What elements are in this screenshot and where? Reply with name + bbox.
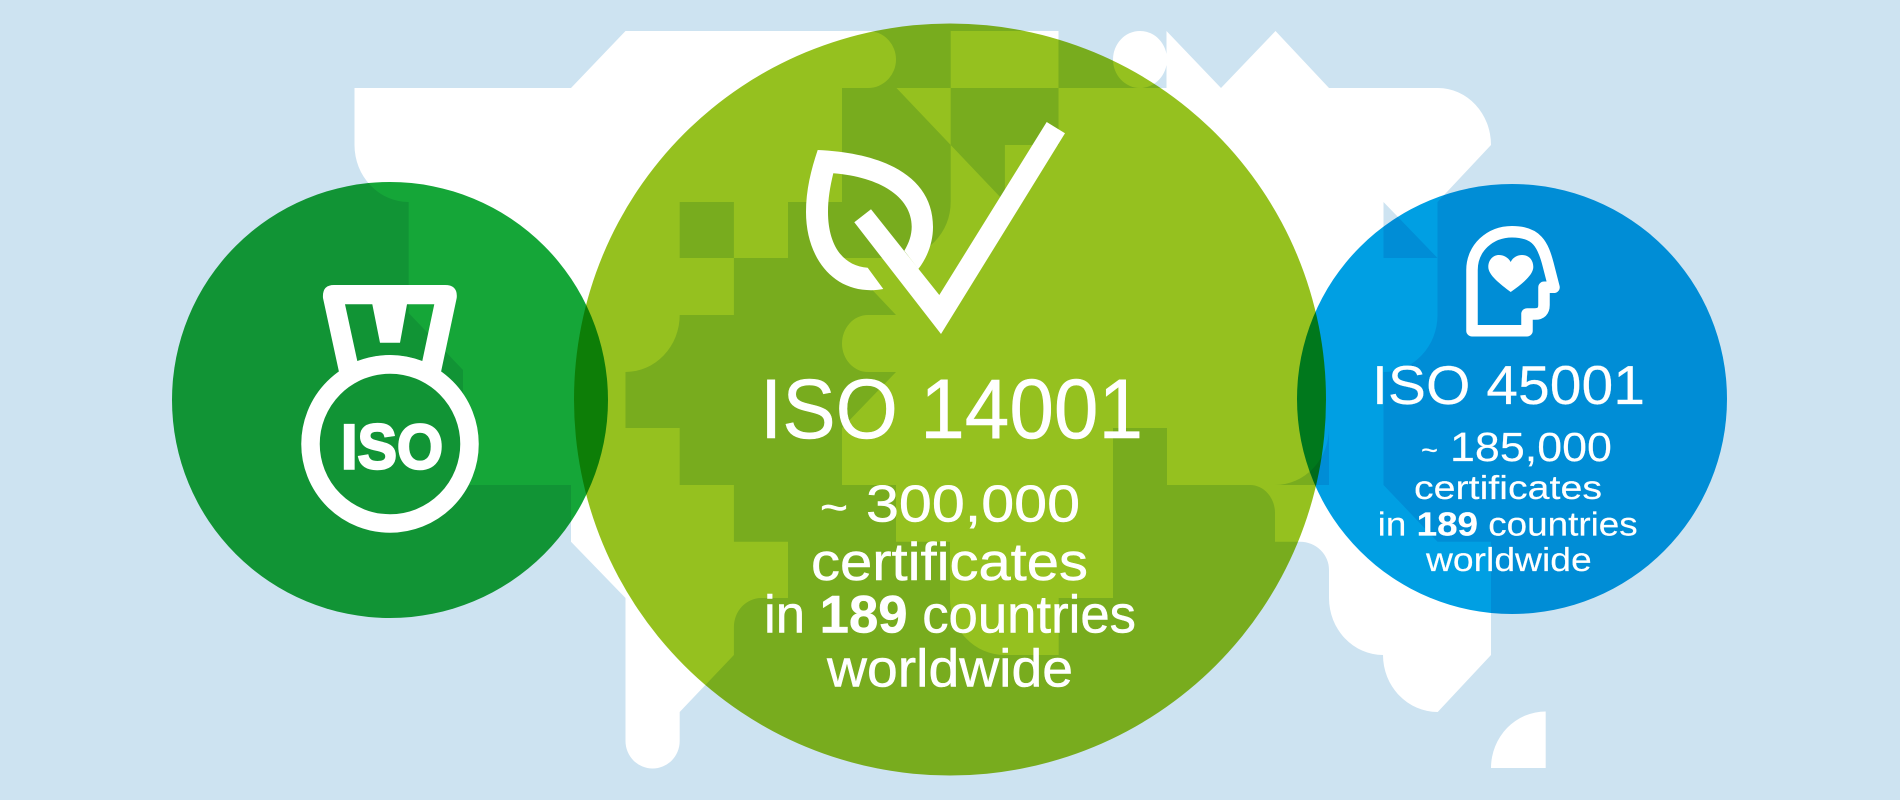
tilde: approx 185,000: ~ bbox=[1421, 435, 1438, 467]
tilde: approx 300,000: ~ bbox=[820, 481, 848, 533]
circle: lime green bbox=[574, 24, 1326, 776]
circle: dark green bbox=[172, 182, 608, 618]
world map silhouette bbox=[354, 31, 1546, 768]
label: in 189 countries: in 189 countries bbox=[1378, 506, 1638, 543]
icon: head with heart bbox=[1472, 232, 1554, 331]
circle: blue bbox=[1297, 184, 1727, 614]
text block: ISO 14001 bbox=[760, 362, 1143, 699]
map: island oval bbox=[1113, 31, 1167, 88]
count: 300,000: 300,000 bbox=[866, 476, 1080, 534]
label: worldwide: worldwide bbox=[826, 640, 1073, 699]
count: 185,000: 185,000 bbox=[1450, 424, 1612, 470]
heading: ISO 45001: ISO 45001 bbox=[1372, 354, 1645, 416]
text block: ISO 45001 bbox=[1372, 354, 1645, 578]
icon: leaf with check mark bbox=[806, 122, 1065, 334]
icon: ISO medal: ISO bbox=[341, 412, 443, 482]
label: in 189 countries: in 189 countries bbox=[764, 586, 1136, 645]
map: eastern continent bbox=[842, 31, 1491, 712]
label: worldwide: worldwide bbox=[1425, 541, 1592, 578]
label: certificates: certificates bbox=[811, 533, 1088, 592]
heading: ISO 14001: ISO 14001 bbox=[760, 362, 1143, 456]
label: certificates: certificates bbox=[1414, 469, 1602, 506]
map: western continent bbox=[354, 31, 896, 768]
map: southern island bbox=[1491, 712, 1546, 768]
map: northern fragments bbox=[896, 31, 1058, 145]
icon: ISO medal bbox=[310, 285, 470, 524]
